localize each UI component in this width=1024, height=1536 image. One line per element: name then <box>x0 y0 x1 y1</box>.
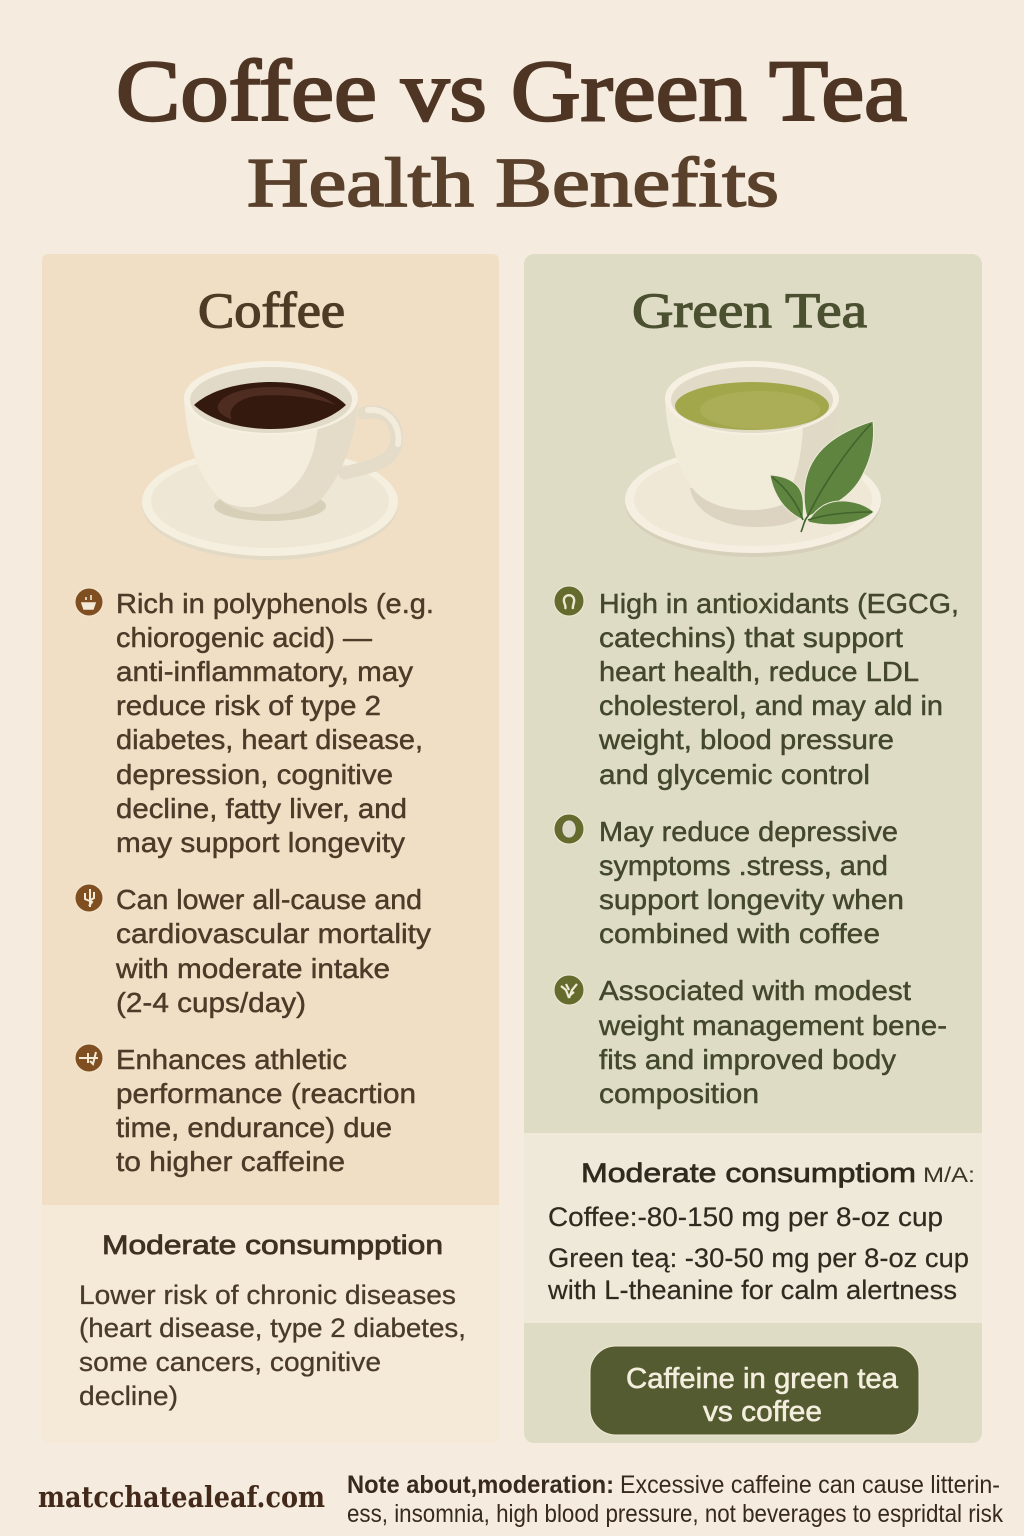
callout: caffeine content: M/A: <box>923 1164 975 1187</box>
bullet: antioxidants: and glycemic control <box>599 759 870 790</box>
icon: green tea cup with leaves <box>625 361 881 557</box>
bullet: antioxidants: High in antioxidants (EGCG, <box>599 588 959 619</box>
footer: moderation note: Excessive caffeine can cause litterin- <box>620 1471 1000 1499</box>
bullet: antioxidants: catechins) that support <box>599 622 903 653</box>
bullet: polyphenols: depression, cognitive <box>116 759 393 790</box>
title <box>116 42 907 222</box>
callout: moderate consumption, coffee: Moderate consumpption <box>102 1230 443 1260</box>
bullet: polyphenols: diabetes, heart disease, <box>116 724 423 755</box>
bullet: weight management: weight management bene- <box>598 1010 947 1041</box>
button: caffeine in green tea vs coffee <box>590 1346 919 1435</box>
icon: tea leaves <box>770 421 874 532</box>
bullet: polyphenols: chiorogenic acid) — <box>116 622 372 653</box>
bullet: antioxidants <box>554 586 959 790</box>
bullet: depressive symptoms <box>554 814 904 949</box>
bullet list: green tea benefits <box>554 586 959 1109</box>
bullet: depressive symptoms: May reduce depressive <box>599 816 898 847</box>
heading: coffee: Coffee <box>198 282 345 338</box>
bullet: polyphenols <box>75 588 434 858</box>
button: caffeine in green tea vs coffee: Caffeine in green tea <box>626 1363 899 1395</box>
bullet: athletic performance <box>75 1044 416 1177</box>
footer: moderation note <box>347 1471 1003 1528</box>
bullet: athletic performance: performance (reacrtion <box>116 1078 416 1109</box>
bullet: mortality: Can lower all-cause and <box>116 884 422 915</box>
callout: caffeine content: Green teą: -30-50 mg per 8-oz cup <box>548 1243 969 1273</box>
callout: caffeine content <box>547 1158 975 1305</box>
heading: green tea: Green Tea <box>632 282 867 338</box>
bullet: antioxidants: heart health, reduce LDL <box>599 656 919 687</box>
bullet: weight management <box>554 975 947 1109</box>
bullet list: coffee benefits <box>75 588 434 1177</box>
footer: website: matcchatealeaf.com <box>38 1480 325 1514</box>
bullet: weight management: Associated with modest <box>599 975 911 1006</box>
bullet: polyphenols: Rich in polyphenols (e.g. <box>116 588 434 619</box>
bullet: weight management: composition <box>599 1078 759 1109</box>
title: Health Benefits <box>247 145 779 222</box>
panel: green tea <box>524 254 982 1443</box>
callout: moderate consumption, coffee <box>79 1230 466 1411</box>
bullet: polyphenols: may support longevity <box>116 827 405 858</box>
icon: coffee cup <box>142 361 398 560</box>
bullet: mortality <box>75 884 431 1018</box>
callout: caffeine content: with L-theanine for calm alertness <box>547 1275 957 1305</box>
bullet: athletic performance: time, endurance) due <box>116 1112 392 1143</box>
bullet: polyphenols: anti-inflammatory, may <box>116 656 413 687</box>
title: Coffee vs Green Tea <box>116 42 907 139</box>
button: caffeine in green tea vs coffee: vs coffee <box>703 1396 822 1428</box>
callout: moderate consumption, coffee: (heart disease, type 2 diabetes, <box>79 1313 466 1343</box>
bullet: mortality: (2-4 cups/day) <box>116 987 306 1018</box>
callout: caffeine content: Coffee:-80-150 mg per 8-oz cup <box>548 1202 943 1232</box>
callout: moderate consumption, coffee: Lower risk of chronic diseases <box>79 1280 456 1310</box>
bullet: mortality: with moderate intake <box>115 953 390 984</box>
bullet: depressive symptoms: symptoms .stress, and <box>599 850 888 881</box>
bullet: weight management: fits and improved body <box>599 1044 896 1075</box>
callout: moderate consumption, coffee: decline) <box>79 1381 178 1411</box>
bullet: polyphenols: decline, fatty liver, and <box>116 793 407 824</box>
bullet: mortality: cardiovascular mortality <box>116 918 431 949</box>
bullet: depressive symptoms: combined with coffee <box>599 918 880 949</box>
bullet: athletic performance: Enhances athletic <box>116 1044 347 1075</box>
callout: moderate consumption, coffee: some cancers, cognitive <box>79 1347 381 1377</box>
bullet: polyphenols: reduce risk of type 2 <box>116 690 381 721</box>
callout: caffeine content: Moderate consumptiom <box>581 1158 916 1188</box>
bullet: depressive symptoms: support longevity when <box>599 884 904 915</box>
footer: moderation note: Note about,moderation: <box>347 1471 614 1499</box>
panel: coffee <box>42 254 499 1443</box>
bullet: antioxidants: weight, blood pressure <box>598 724 894 755</box>
bullet: antioxidants: cholesterol, and may ald in <box>599 690 943 721</box>
bullet: athletic performance: to higher caffeine <box>116 1146 345 1177</box>
